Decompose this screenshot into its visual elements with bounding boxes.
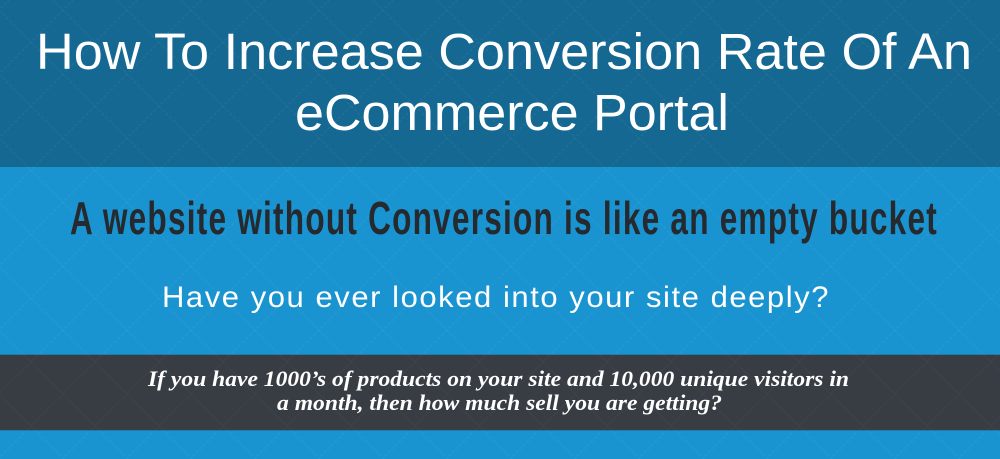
question line: Have you ever looked into your site deeply? [162, 281, 830, 314]
panel: main blue band [0, 167, 1000, 459]
panel: title band [0, 0, 1000, 167]
title: How To Increase Conversion Rate Of An [36, 23, 972, 80]
panel: dark callout band [0, 354, 1000, 431]
callout text: a month, then how much sell you are getting? [277, 390, 722, 415]
callout text: If you have 1000’s of products on your site and 10,000 unique visitors in [147, 366, 849, 391]
callout text [147, 366, 849, 415]
title: eCommerce Portal [295, 84, 729, 141]
title [36, 23, 972, 141]
